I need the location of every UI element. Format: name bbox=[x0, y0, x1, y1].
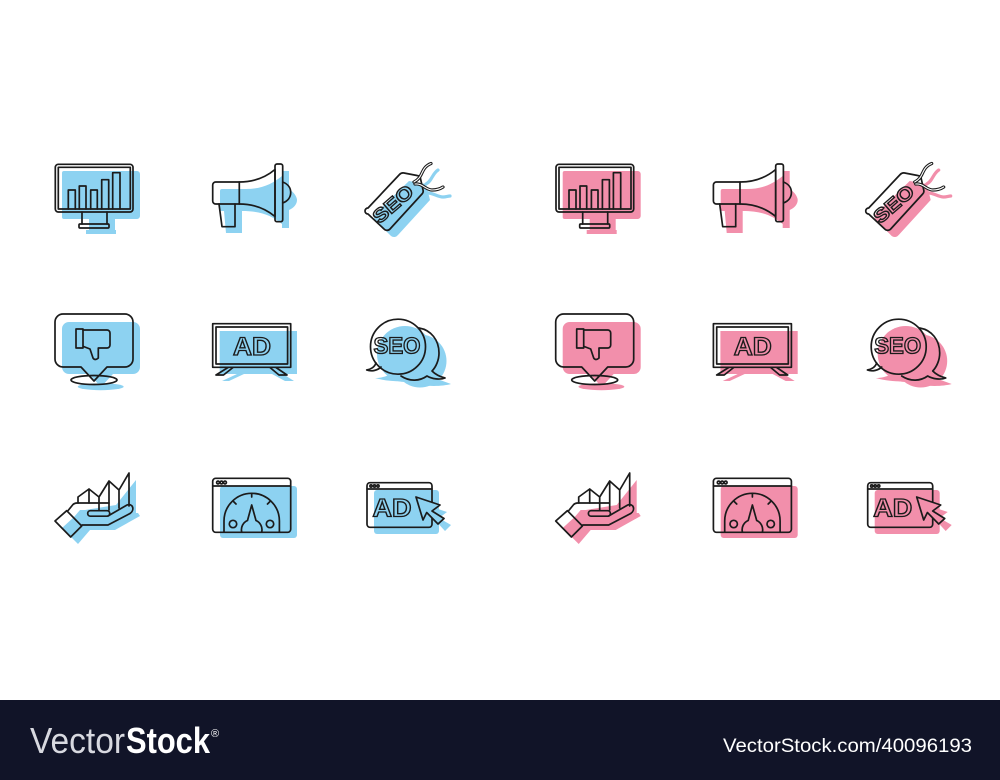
icon: browser with AD and cursor bbox=[367, 483, 451, 534]
icon: hand holding growth chart bbox=[55, 473, 140, 544]
label: SEO: SEO bbox=[374, 332, 420, 358]
icon: browser with speedometer bbox=[213, 478, 297, 538]
icon: browser with AD and cursor bbox=[868, 483, 952, 534]
icon: browser with speedometer bbox=[713, 478, 798, 538]
icon: megaphone bbox=[213, 164, 297, 233]
icon: TV with AD bbox=[713, 324, 798, 381]
icon: thumbs down speech bubble bbox=[556, 314, 641, 390]
label: AD: AD bbox=[372, 495, 412, 523]
logo: VectorStock: Stock bbox=[126, 720, 211, 761]
icon: monitor with bar chart bbox=[55, 164, 140, 234]
icon: SEO price tag bbox=[866, 164, 951, 237]
icon: SEO speech bubbles bbox=[867, 319, 952, 388]
label: SEO: SEO bbox=[874, 332, 921, 358]
label: SEO: SEO bbox=[369, 181, 418, 228]
logo: VectorStock: Vector bbox=[30, 720, 125, 761]
label: AD: AD bbox=[233, 333, 271, 361]
label: AD: AD bbox=[873, 495, 912, 523]
icon: monitor with bar chart bbox=[556, 164, 641, 234]
image id link text: VectorStock.com/40096193 bbox=[723, 736, 972, 757]
icon: SEO speech bubbles bbox=[367, 319, 451, 388]
label: SEO: SEO bbox=[870, 181, 919, 228]
icon: thumbs down speech bubble bbox=[55, 314, 140, 390]
icon: megaphone bbox=[713, 164, 798, 233]
icon: TV with AD bbox=[213, 324, 297, 381]
registered mark: ® bbox=[211, 728, 219, 740]
icon: SEO price tag bbox=[365, 164, 450, 237]
icon: hand holding growth chart bbox=[556, 473, 641, 544]
footer bar bbox=[0, 700, 1000, 780]
label: AD: AD bbox=[734, 333, 772, 361]
panel: blue icon set bbox=[55, 164, 451, 544]
logo: VectorStock bbox=[30, 720, 211, 761]
panel: pink icon set bbox=[556, 164, 952, 544]
